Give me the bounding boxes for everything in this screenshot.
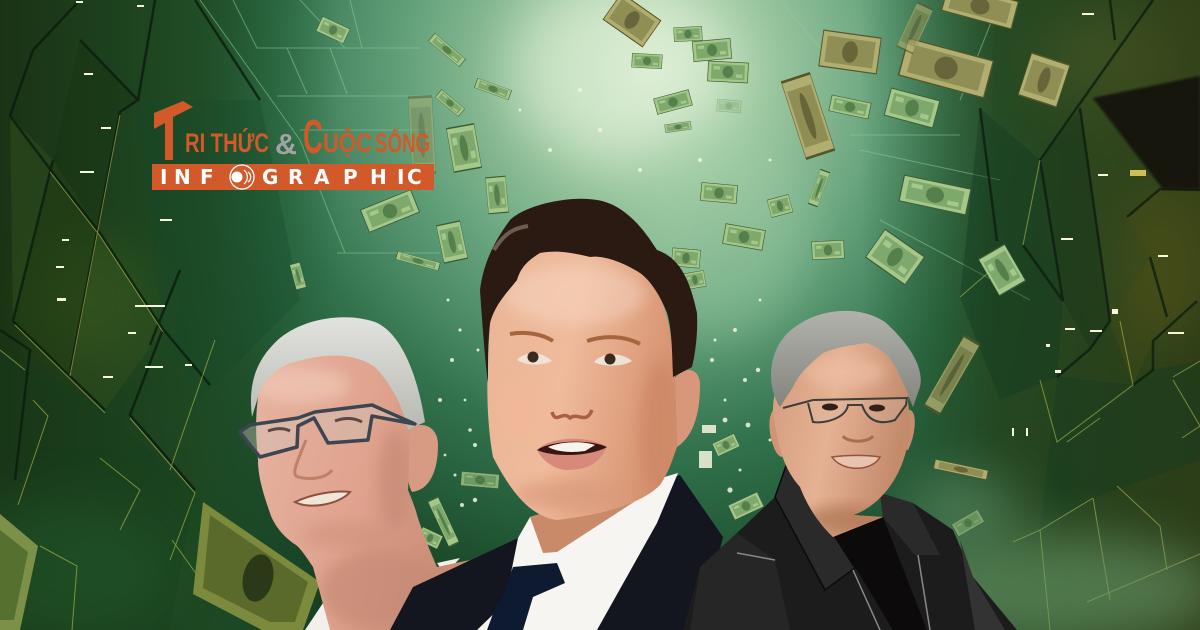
logo subtitle: UỘC [323, 127, 372, 158]
big olive banknote bottom left [193, 502, 320, 630]
portrait: right man with leather jacket and glasses [683, 311, 1017, 630]
dark object at top right [1093, 76, 1200, 189]
right wall panels [960, 0, 1200, 530]
ceiling grid lines [200, 0, 1030, 300]
portrait: left man with white hair and glasses [240, 317, 470, 630]
logo: Tri thức & Cuộc sống Infographic [152, 101, 434, 190]
glasses [783, 398, 907, 422]
logo subtitle: C [303, 111, 323, 164]
portrait: centre man in dark suit [390, 199, 723, 630]
eyebrows [510, 333, 640, 344]
nose [843, 436, 873, 441]
mouth [295, 491, 350, 506]
left wall panel lines [0, 0, 260, 630]
logo mark: orange T [154, 101, 193, 160]
logo banner [152, 164, 434, 190]
mouth [832, 456, 880, 468]
sparkling lights [56, 1, 1184, 507]
logo title: RI THỨC [185, 127, 269, 158]
logo subtitle: SỐNG [375, 126, 430, 158]
left wall panels [0, 40, 300, 630]
banknote at left edge [0, 514, 38, 630]
right wall panel lines [960, 0, 1200, 630]
ear [675, 370, 700, 447]
bottom-right green smoke [880, 535, 1200, 630]
logo banner: GRAPHIC [262, 165, 422, 189]
ears [769, 408, 786, 457]
mouth [537, 439, 607, 470]
nose [552, 410, 592, 418]
logo banner: INF [160, 165, 214, 189]
ear [406, 425, 438, 492]
glasses [240, 405, 415, 457]
nose [295, 440, 332, 478]
logo ampersand: & [275, 129, 297, 161]
logo subtitle [303, 111, 430, 164]
eyes [517, 353, 552, 365]
shirt collar [305, 558, 460, 630]
